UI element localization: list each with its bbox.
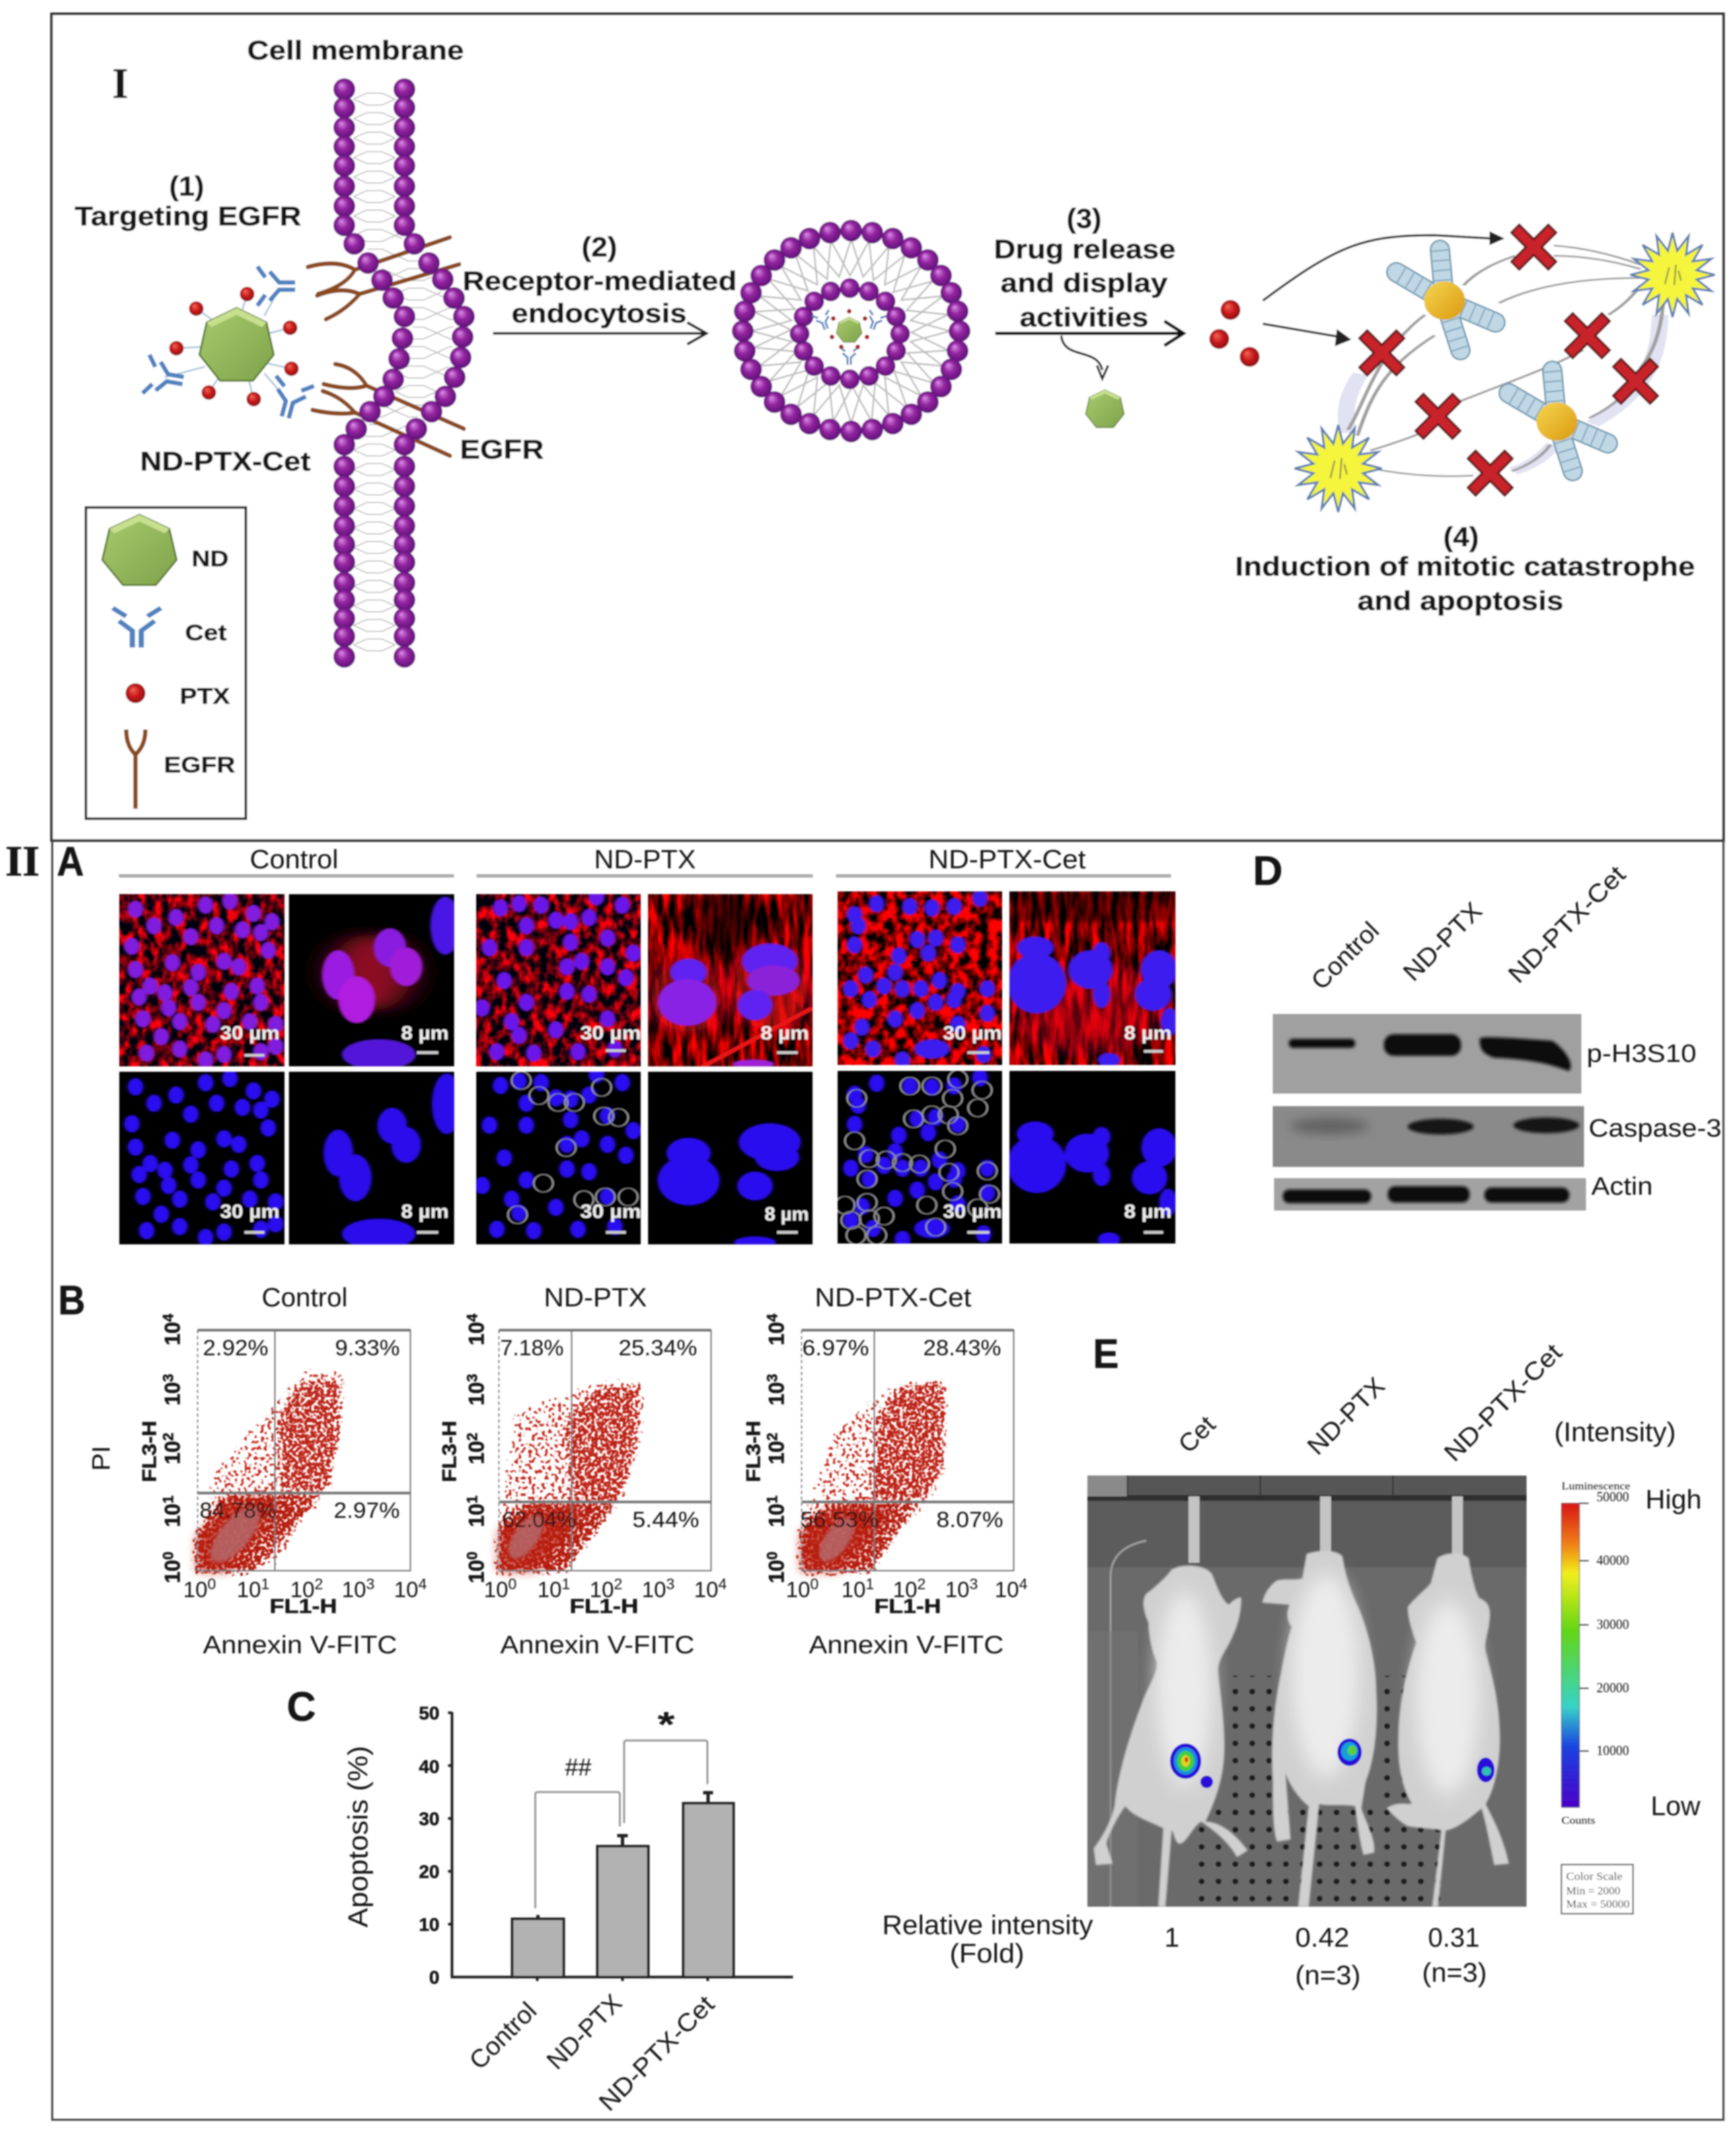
scatter plot: ND-PTX-Cet: 10 xyxy=(765,1441,788,1464)
label E: E xyxy=(1093,1331,1119,1377)
scatter plot: ND-PTX-Cet: 2 xyxy=(917,1575,926,1592)
legend: ND: ND xyxy=(192,546,229,572)
legend: Cet: Cet xyxy=(185,620,227,646)
text: step 2 receptor-mediated endocytosis: endocytosis xyxy=(511,298,687,328)
color scale range box: Color Scale xyxy=(1566,1870,1622,1883)
legend: EGFR: EGFR xyxy=(164,753,235,778)
scatter plot: ND-PTX-Cet: FL1-H xyxy=(874,1594,941,1618)
text: step 3 drug release: (3) xyxy=(1067,203,1102,234)
text: step 4 induction of mitotic catastrophe: (4) xyxy=(1443,521,1479,552)
group headers: ND-PTX xyxy=(594,845,696,874)
scatter plot: ND-PTX-Cet: 6.97% xyxy=(802,1335,869,1360)
scatter plot: control: 10 xyxy=(342,1577,366,1602)
scatter plot: control: 0 xyxy=(208,1575,216,1592)
scatter plot: control: 84.78% xyxy=(200,1498,276,1522)
significance brackets xyxy=(535,1740,707,1908)
text: step 3 drug release: Drug release xyxy=(994,234,1176,264)
scatter plot: control: 3 xyxy=(366,1575,375,1592)
tile: ND-PTX 30 um merged xyxy=(474,889,641,1066)
y axis tick labels: 30 xyxy=(419,1809,439,1829)
color scale bar: 30000 xyxy=(1597,1616,1629,1632)
scatter plot: control: 2.92% xyxy=(203,1335,268,1360)
scatter plot: ND-PTX: 10 xyxy=(589,1577,614,1602)
scatter plot: ND-PTX: 10 xyxy=(465,1322,488,1345)
blot: caspase-3: Caspase-3 xyxy=(1589,1115,1721,1142)
tumor signals xyxy=(1170,1739,1495,1788)
scatter plot: ND-PTX-Cet xyxy=(743,1283,1028,1659)
scatter plot: control: 10 xyxy=(161,1559,184,1583)
scatter plot: ND-PTX-Cet: 4 xyxy=(764,1313,780,1322)
relative intensity values: (n=3) xyxy=(1422,1957,1487,1988)
scale bars and labels: 30 µm xyxy=(580,1023,641,1044)
scatter plot: ND-PTX-Cet: Annexin V-FITC xyxy=(809,1631,1004,1659)
scatter plot: control: 10 xyxy=(183,1577,208,1602)
panel II numeral: II xyxy=(5,837,40,885)
scatter plot: control: 4 xyxy=(418,1575,427,1592)
legend: Cet xyxy=(113,608,227,648)
lane labels: Control xyxy=(1306,917,1384,995)
tile: ND-PTX 8 um merged xyxy=(648,887,813,1068)
blot: p-H3S10 xyxy=(1273,1014,1696,1094)
lane labels: ND-PTX xyxy=(1398,897,1488,987)
scatter plot: control: 1 xyxy=(261,1575,270,1592)
scatter plot: control: FL3-H xyxy=(139,1421,161,1482)
relative intensity values: (n=3) xyxy=(1295,1960,1361,1990)
scale bars and labels: 30 µm xyxy=(220,1023,280,1044)
scatter plot: ND-PTX-Cet: 3 xyxy=(764,1374,780,1382)
scatter plot: ND-PTX-Cet: 1 xyxy=(866,1575,874,1592)
scale bars and labels: 8 µm xyxy=(401,1023,449,1044)
x axis category labels xyxy=(465,1989,720,2116)
scatter plot: ND-PTX-Cet: 10 xyxy=(765,1559,788,1583)
relative intensity values xyxy=(882,1910,1487,1990)
text: step 4 induction of mitotic catastrophe xyxy=(1235,521,1695,616)
icon: endosome vesicle xyxy=(732,219,970,443)
scatter plot: control: 1 xyxy=(160,1495,176,1503)
scatter plot: control: 2.97% xyxy=(334,1498,400,1522)
heading: cell membrane: Cell membrane xyxy=(247,35,464,65)
tile: ND-PTX 30 um DAPI xyxy=(474,1066,641,1239)
x axis category labels: Control xyxy=(465,1997,543,2075)
tile: ND-PTX-Cet 8 um DAPI xyxy=(1007,1121,1177,1246)
scatter plot: ND-PTX-Cet: 2 xyxy=(764,1433,780,1441)
color scale bar: 40000 xyxy=(1597,1552,1629,1568)
scatter plot: ND-PTX: 1 xyxy=(464,1495,480,1503)
scatter plot: control: 4 xyxy=(160,1313,176,1322)
color scale range box: Min = 2000 xyxy=(1566,1885,1620,1897)
axes xyxy=(448,1712,793,1981)
scatter plot: ND-PTX-Cet: 1 xyxy=(764,1495,780,1503)
scatter plot: ND-PTX-Cet: 4 xyxy=(1019,1575,1028,1592)
arrow: drug release xyxy=(995,321,1184,346)
intensity heading: (Intensity) xyxy=(1554,1417,1676,1447)
scatter plot: ND-PTX: 62.04% xyxy=(502,1507,576,1532)
scatter plot: control: 10 xyxy=(394,1577,418,1602)
scale bars and labels xyxy=(220,1023,1172,1234)
arrow: endocytosis xyxy=(493,322,706,344)
scatter plot: ND-PTX: 10 xyxy=(465,1382,488,1405)
scale bars and labels: 30 µm xyxy=(580,1201,641,1222)
scatter plot: ND-PTX: FL3-H xyxy=(439,1421,461,1482)
scatter plot: ND-PTX: 10 xyxy=(642,1577,666,1602)
scatter plot: ND-PTX-Cet: 10 xyxy=(765,1322,788,1345)
scatter plot: ND-PTX xyxy=(439,1283,727,1659)
tile: control 30 um merged xyxy=(120,893,285,1068)
scatter plot: ND-PTX-Cet: 56.53% xyxy=(800,1507,879,1532)
high and low labels: High xyxy=(1645,1484,1702,1515)
scatter plot: ND-PTX: 10 xyxy=(465,1559,488,1583)
lane labels xyxy=(1306,860,1632,995)
text: step 2 receptor-mediated endocytosis: (2) xyxy=(582,231,617,262)
color scale bar: 10000 xyxy=(1597,1742,1629,1758)
scatter plot: control xyxy=(139,1283,427,1659)
legend: EGFR xyxy=(126,730,235,809)
panel I numeral: I xyxy=(112,59,128,108)
icon: ND-PTX-Cet nanoparticle xyxy=(143,266,314,422)
blot: actin xyxy=(1274,1173,1653,1211)
tile: ND-PTX-Cet 8 um merged xyxy=(1007,891,1178,1066)
scale bars and labels: 8 µm xyxy=(1124,1023,1172,1044)
relative intensity values: 1 xyxy=(1164,1922,1180,1953)
scatter plot: ND-PTX-Cet: 28.43% xyxy=(923,1335,1001,1360)
legend: ND xyxy=(102,515,229,585)
scatter plot: ND-PTX: 0 xyxy=(508,1575,517,1592)
relative intensity values: (Fold) xyxy=(950,1938,1024,1968)
y axis tick labels: 40 xyxy=(419,1756,439,1777)
scatter plot: control: 2 xyxy=(315,1575,323,1592)
scatter plot: ND-PTX: 7.18% xyxy=(500,1335,564,1360)
error bars xyxy=(538,1793,713,1919)
scatter plot: ND-PTX-Cet: 10 xyxy=(893,1577,917,1602)
lane labels: ND-PTX-Cet xyxy=(1503,860,1632,989)
black tile backgrounds xyxy=(120,891,1176,1244)
group labels: ND-PTX xyxy=(1302,1372,1390,1460)
y axis title: Apoptosis (%) xyxy=(342,1746,373,1927)
blot: caspase-3 xyxy=(1273,1106,1721,1167)
tile: ND-PTX-Cet 30 um DAPI xyxy=(835,1069,999,1248)
label D: D xyxy=(1253,848,1283,894)
text: step 2 receptor-mediated endocytosis: Receptor-mediated xyxy=(463,266,737,296)
panel E: in vivo imaging xyxy=(882,1331,1702,1990)
scatter plot: control: 10 xyxy=(290,1577,315,1602)
tile: control 30 um DAPI xyxy=(124,1070,283,1246)
axis label PI: PI xyxy=(88,1446,116,1471)
text: step 4 induction of mitotic catastrophe: and apoptosis xyxy=(1357,585,1564,616)
group labels xyxy=(1174,1339,1567,1467)
text: step 3 drug release xyxy=(994,203,1176,332)
y axis tick labels: 20 xyxy=(419,1861,439,1882)
significance marks: ## xyxy=(565,1754,591,1781)
panel D: western blot xyxy=(1253,848,1721,1211)
label A: A xyxy=(57,839,84,885)
group labels: Cet xyxy=(1174,1411,1221,1458)
scatter plot: control: 0 xyxy=(160,1552,176,1559)
scatter plot: ND-PTX: 4 xyxy=(464,1313,480,1322)
tubes xyxy=(1189,1497,1463,1563)
scatter plot: ND-PTX-Cet: 10 xyxy=(765,1503,788,1527)
text: ND-PTX-Cet label: ND-PTX-Cet xyxy=(140,446,311,476)
scatter plot: ND-PTX: 3 xyxy=(464,1374,480,1382)
scatter plot: ND-PTX-Cet: 8.07% xyxy=(936,1507,1003,1532)
scatter plot: ND-PTX: 1 xyxy=(562,1575,570,1592)
scatter plot: ND-PTX: 2 xyxy=(614,1575,623,1592)
bioluminescence photo of mice xyxy=(1088,1476,1527,1906)
scatter plot: ND-PTX-Cet: 0 xyxy=(764,1552,780,1559)
legend box xyxy=(86,507,246,819)
text: step 2 receptor-mediated endocytosis xyxy=(463,231,737,328)
scatter plot: ND-PTX: 10 xyxy=(484,1577,508,1602)
y axis tick labels: 0 xyxy=(429,1967,439,1988)
scatter plot: ND-PTX: 4 xyxy=(718,1575,727,1592)
relative intensity values: 0.31 xyxy=(1428,1922,1480,1953)
panel C: apoptosis bar chart xyxy=(287,1684,793,2116)
scatter plot: ND-PTX: 10 xyxy=(694,1577,718,1602)
blot: p-H3S10: p-H3S10 xyxy=(1587,1040,1696,1068)
relative intensity values: 0.42 xyxy=(1295,1922,1349,1953)
high and low labels: Low xyxy=(1651,1791,1700,1821)
membrane lipid heads xyxy=(333,78,474,667)
scatter plot: control: 3 xyxy=(160,1374,176,1382)
group headers xyxy=(119,845,1171,876)
text: step 3 drug release: and display xyxy=(1000,268,1168,298)
scatter plot: ND-PTX: ND-PTX xyxy=(544,1283,647,1312)
text: step 4 induction of mitotic catastrophe: Induction of mitotic catastrophe xyxy=(1235,551,1695,581)
arrows: PTX to microtubules xyxy=(1263,231,1505,346)
arrow: curved release of ND xyxy=(1061,336,1108,379)
relative intensity values: Relative intensity xyxy=(882,1910,1093,1940)
scatter plot: control: 10 xyxy=(161,1503,184,1527)
scatter plot: ND-PTX: 5.44% xyxy=(632,1507,699,1532)
scatter plot: ND-PTX: 10 xyxy=(465,1441,488,1464)
legend: PTX: PTX xyxy=(180,684,230,709)
text: EGFR label: EGFR xyxy=(460,434,544,465)
scatter plot: ND-PTX-Cet: 10 xyxy=(841,1577,866,1602)
blot: actin: Actin xyxy=(1591,1173,1653,1201)
scatter plot: ND-PTX-Cet: 10 xyxy=(995,1577,1019,1602)
icon: PTX molecules xyxy=(1209,300,1260,367)
high and low labels xyxy=(1645,1484,1702,1821)
scatter plot: ND-PTX-Cet: 0 xyxy=(810,1575,819,1592)
color scale range box: Max = 50000 xyxy=(1566,1898,1630,1910)
text: step 1 targeting EGFR: (1) xyxy=(169,170,204,202)
color scale bar xyxy=(1562,1481,1630,1826)
scatter plot: control: FL1-H xyxy=(270,1594,337,1618)
scatter plot: ND-PTX-Cet: 10 xyxy=(945,1577,969,1602)
legend: PTX xyxy=(126,683,230,709)
y axis tick labels xyxy=(419,1703,439,1988)
bars xyxy=(512,1803,734,1977)
color scale bar: 50000 xyxy=(1597,1489,1629,1505)
microscopy image tiles xyxy=(120,887,1178,1249)
scatter plot: control: 10 xyxy=(237,1577,261,1602)
scatter plot: ND-PTX: FL1-H xyxy=(570,1594,638,1618)
label B: B xyxy=(58,1278,85,1324)
scatter plot: control: 2 xyxy=(160,1433,176,1441)
scale bars and labels: 30 µm xyxy=(220,1201,280,1222)
panel I: mechanism schematic xyxy=(52,14,1723,841)
scatter plot: ND-PTX-Cet: 3 xyxy=(969,1575,978,1592)
group headers: ND-PTX-Cet xyxy=(928,845,1086,874)
tile: ND-PTX-Cet 30 um merged xyxy=(838,890,1002,1068)
x axis category labels: ND-PTX xyxy=(542,1989,628,2075)
scatter plot: control: 10 xyxy=(161,1382,184,1405)
tile: control 8 um merged xyxy=(322,897,460,1070)
scatter plot: ND-PTX: 25.34% xyxy=(619,1335,697,1360)
significance marks: * xyxy=(658,1705,675,1744)
tile: ND-PTX 8 um DAPI xyxy=(658,1123,801,1248)
icon: mitotic spindle with crosses xyxy=(1295,225,1715,512)
scatter plot: ND-PTX: 3 xyxy=(666,1575,675,1592)
color scale bar: Counts xyxy=(1562,1815,1595,1826)
color scale range box xyxy=(1562,1865,1633,1914)
color scale bar: Luminescence xyxy=(1562,1481,1630,1492)
scale bars and labels: 8 µm xyxy=(401,1201,449,1222)
y axis tick labels: 10 xyxy=(419,1914,439,1935)
panel B: flow cytometry xyxy=(58,1278,1028,1659)
perforated plate xyxy=(1193,1676,1446,1906)
icon: released ND xyxy=(1086,390,1124,428)
scatter plot: control: 10 xyxy=(161,1441,184,1464)
text: step 3 drug release: activities xyxy=(1020,302,1149,332)
label C: C xyxy=(287,1684,316,1730)
scatter plot: ND-PTX-Cet: FL3-H xyxy=(743,1421,765,1482)
scatter plot: control: Control xyxy=(262,1283,348,1312)
scale bars and labels: 30 µm xyxy=(943,1201,1002,1222)
scatter plot: ND-PTX-Cet: 10 xyxy=(765,1382,788,1405)
group headers: Control xyxy=(250,845,338,874)
tile: control 8 um DAPI xyxy=(324,1074,461,1249)
cell membrane bilayer xyxy=(308,78,474,667)
group labels: ND-PTX-Cet xyxy=(1439,1339,1567,1467)
scatter plot: ND-PTX: 10 xyxy=(537,1577,562,1602)
scatter plot: control: Annexin V-FITC xyxy=(203,1631,397,1659)
mouse bodies xyxy=(1094,1551,1509,1906)
scatter plot: ND-PTX: 10 xyxy=(465,1503,488,1527)
scatter plot: ND-PTX-Cet: ND-PTX-Cet xyxy=(815,1283,971,1312)
scatter plot: ND-PTX: Annexin V-FITC xyxy=(500,1631,695,1659)
EGFR receptors embedded in membrane xyxy=(308,237,464,456)
x axis category labels: ND-PTX-Cet xyxy=(594,1990,720,2116)
scale bars and labels: 30 µm xyxy=(943,1023,1002,1044)
text: step 1 targeting EGFR xyxy=(75,170,301,231)
panel II frame xyxy=(52,841,1723,2120)
scatter plot: ND-PTX-Cet: 10 xyxy=(786,1577,810,1602)
text: step 1 targeting EGFR: Targeting EGFR xyxy=(75,201,301,231)
y axis tick labels: 50 xyxy=(419,1703,439,1723)
scatter plot: ND-PTX: 2 xyxy=(464,1433,480,1441)
scale bars and labels: 8 µm xyxy=(765,1204,809,1225)
scale bars and labels: 8 µm xyxy=(761,1023,809,1044)
scale bars and labels: 8 µm xyxy=(1124,1201,1172,1222)
scatter plot: control: 9.33% xyxy=(335,1335,400,1360)
significance marks xyxy=(565,1705,675,1781)
color scale bar: 20000 xyxy=(1597,1680,1629,1696)
panel A: fluorescence microscopy xyxy=(57,839,1178,1249)
scatter plot: ND-PTX: 0 xyxy=(464,1552,480,1559)
scatter plot: control: 10 xyxy=(161,1322,184,1345)
